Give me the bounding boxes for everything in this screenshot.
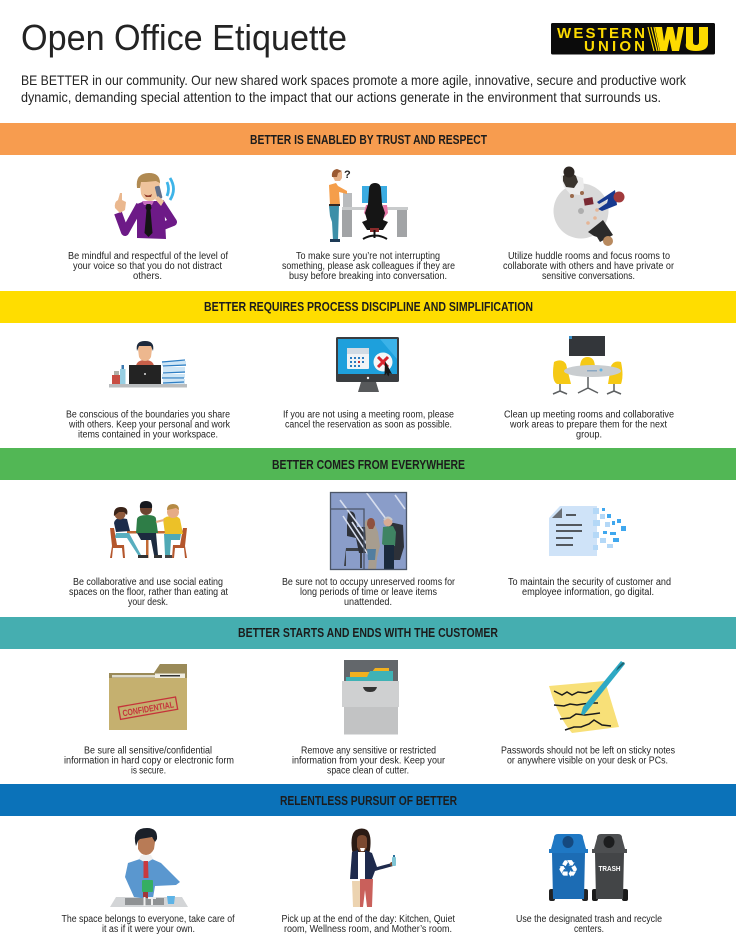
captions: row 1: others.: [133, 271, 162, 282]
icon: meeting room table: [553, 336, 622, 394]
banner: relentless pursuit: [0, 784, 736, 816]
icon: man on phone: [115, 173, 174, 239]
banner: starts and ends with the customer: BETTER STARTS AND ENDS WITH THE CUSTOMER: [238, 626, 498, 640]
intro paragraph: [21, 72, 687, 105]
captions: row 4: information in hard copy or electronic form: [64, 756, 234, 766]
icon: tidy desk: [109, 341, 187, 388]
captions: row 1: Utilize huddle rooms and focus rooms to: [508, 251, 670, 262]
icon: sticky note with pen: [549, 661, 625, 733]
captions: row 1: Be mindful and respectful of the level of: [68, 251, 228, 262]
icon: confidential folder: [109, 664, 187, 730]
captions: row 4: Passwords should not be left on sticky notes: [501, 746, 675, 756]
captions: row 2: [66, 410, 674, 440]
banner: trust and respect: [0, 123, 736, 155]
icon: asking a busy colleague: [329, 169, 408, 242]
captions: row 2: work areas to prepare them for the next: [509, 420, 667, 430]
banner: trust and respect: BETTER IS ENABLED BY TRUST AND RESPECT: [250, 133, 487, 147]
icon: social eating: [110, 501, 187, 558]
icon: document turning digital: [549, 506, 626, 556]
captions: row 2: If you are not using a meeting room, please: [283, 410, 454, 420]
captions: row 3: Be collaborative and use social eating: [73, 577, 223, 588]
banner: process discipline: BETTER REQUIRES PROCESS DISCIPLINE AND SIMPLIFICATION: [204, 300, 533, 314]
captions: row 2: Be conscious of the boundaries you share: [66, 410, 230, 420]
banner: relentless pursuit: RELENTLESS PURSUIT OF BETTER: [280, 794, 457, 808]
captions: row 1: [68, 251, 675, 282]
logo: Western Union: UNION: [584, 38, 645, 55]
banner: process discipline: [0, 291, 736, 323]
captions: row 5: it as if it were your own.: [102, 924, 195, 935]
icon: room with people at glass wall: [330, 492, 407, 570]
captions: row 2: items contained in your workspace.: [78, 430, 218, 440]
captions: row 4: space clean of cutter.: [327, 766, 409, 776]
intro paragraph: dynamic, demanding special attention to the impact that our actions generate in the environment that surrounds us.: [21, 89, 661, 105]
captions: row 3: To maintain the security of customer and: [508, 577, 671, 588]
captions: row 3: spaces on the floor, rather than eating at: [69, 587, 228, 598]
captions: row 1: To make sure you’re not interrupting: [296, 251, 440, 262]
captions: row 3: [69, 577, 671, 608]
captions: row 2: cancel the reservation as soon as possible.: [285, 420, 452, 430]
title: Open Office Etiquette: [21, 17, 347, 58]
banner: starts and ends with the customer: [0, 617, 736, 649]
icon: recycling and trash bins: [549, 834, 628, 901]
captions: row 5: The space belongs to everyone, take care of: [62, 914, 235, 925]
icon: recycling and trash bins: ♻: [557, 855, 579, 883]
banner: comes from everywhere: [0, 448, 736, 480]
captions: row 4: Be sure all sensitive/confidential: [84, 746, 212, 756]
icon: huddle room from above: [554, 166, 624, 246]
captions: row 3: unattended.: [344, 597, 392, 608]
icon: woman with water bottle: [350, 828, 396, 907]
logo: Western Union: WESTERN: [557, 25, 645, 42]
captions: row 1: something, please ask colleagues if they are: [282, 261, 455, 272]
captions: row 1: sensitive conversations.: [542, 271, 635, 282]
captions: row 2: Clean up meeting rooms and collaborative: [504, 410, 674, 420]
captions: row 5: centers.: [574, 924, 604, 935]
captions: row 4: Remove any sensitive or restricted: [301, 746, 436, 756]
captions: row 3: long periods of time or leave items: [300, 587, 437, 598]
captions: row 4: is secure.: [131, 766, 166, 776]
captions: row 3: Be sure not to occupy unreserved rooms for: [282, 577, 456, 588]
icon: open file drawer: [342, 660, 399, 734]
captions: row 4: or anywhere visible on your desk or PCs.: [507, 756, 668, 766]
captions: row 1: collaborate with others and have private or: [503, 261, 675, 272]
banner: comes from everywhere: BETTER COMES FROM EVERYWHERE: [272, 458, 465, 472]
captions: row 3: your desk.: [128, 597, 168, 608]
logo: Western Union: [551, 23, 715, 55]
captions: row 3: employee information, go digital.: [522, 587, 654, 598]
captions: row 2: group.: [576, 430, 602, 440]
icon: monitor with cancelled calendar: [336, 337, 399, 392]
captions: row 5: [62, 914, 662, 935]
captions: row 5: Pick up at the end of the day: Kitchen, Quiet: [282, 914, 455, 925]
icon: man washing dishes: [110, 828, 188, 907]
captions: row 4: [64, 746, 675, 776]
icon: confidential folder: CONFIDENTIAL: [122, 699, 175, 718]
icon: recycling and trash bins: TRASH: [598, 864, 620, 873]
captions: row 4: information from your desk. Keep your: [292, 756, 446, 766]
captions: row 1: your voice so that you do not distract: [73, 261, 222, 272]
captions: row 5: Use the designated trash and recycle: [516, 914, 662, 925]
captions: row 5: room, Wellness room, and Mother’s room.: [284, 924, 452, 935]
icon: asking a busy colleague: ?: [344, 169, 351, 181]
captions: row 2: with others. Keep your personal and work: [68, 420, 231, 430]
captions: row 1: busy before breaking into conversation.: [289, 271, 447, 282]
